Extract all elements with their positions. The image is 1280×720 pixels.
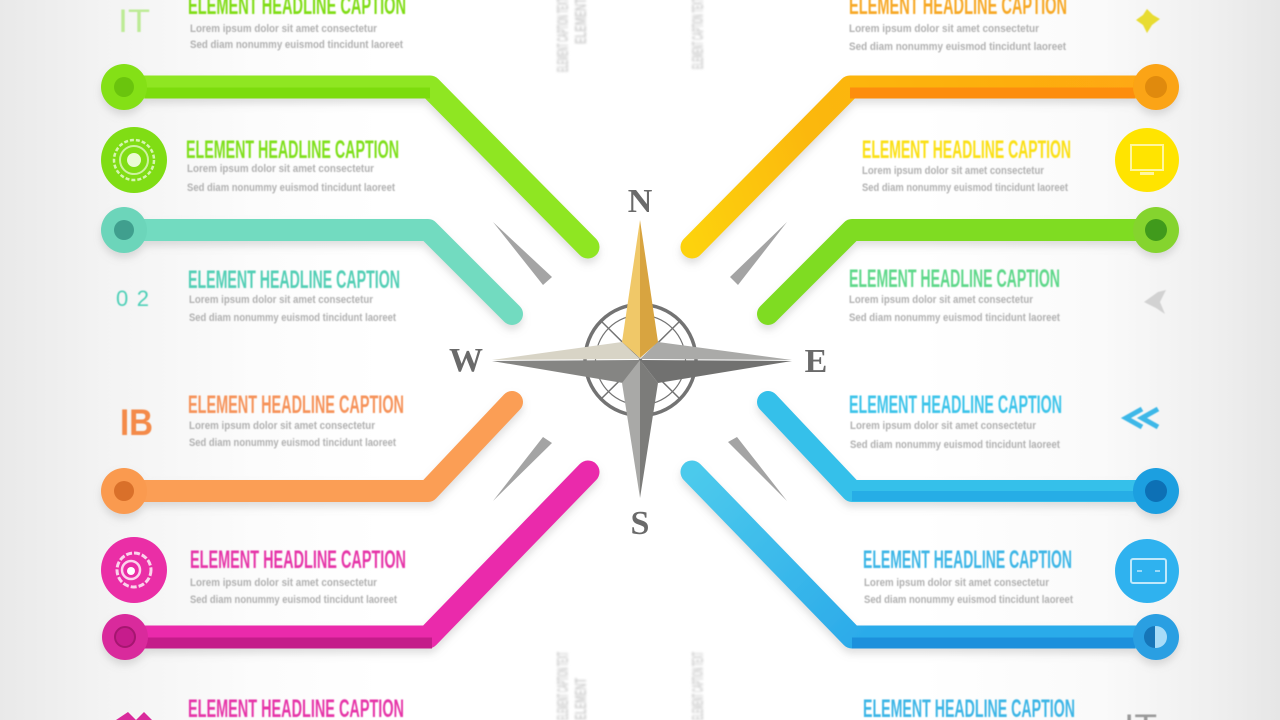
- icon: 02 label, teal: 0 2: [116, 286, 149, 311]
- vertical text strips: top: [555, 0, 707, 72]
- connector: sky blue, lower right: [768, 402, 1179, 514]
- needle: northeast: [730, 222, 787, 285]
- text block: green: [186, 136, 399, 194]
- needle: northwest: [493, 222, 552, 285]
- needle: southeast: [728, 437, 787, 501]
- text block: blue: ELEMENT HEADLINE CAPTION: [863, 546, 1072, 574]
- text block: upper left: Sed diam nonummy euismod tincidunt laoreet: [190, 39, 403, 51]
- text block: teal: ELEMENT HEADLINE CAPTION: [188, 266, 400, 294]
- text block: magenta: Sed diam nonummy euismod tincidunt laoreet: [190, 594, 397, 606]
- text block: teal: Sed diam nonummy euismod tincidunt laoreet: [189, 312, 396, 324]
- text block: upper right: Lorem ipsum dolor sit amet consectetur: [849, 23, 1040, 35]
- text block: orange: Lorem ipsum dolor sit amet consectetur: [189, 420, 376, 432]
- south point: [622, 360, 658, 498]
- text block: orange: Sed diam nonummy euismod tincidunt laoreet: [189, 437, 396, 449]
- text block: green: Lorem ipsum dolor sit amet consectetur: [187, 163, 375, 175]
- icon: blue screen badge: [1115, 539, 1179, 603]
- compass rose: [492, 220, 792, 498]
- text block: green: ELEMENT HEADLINE CAPTION: [186, 136, 399, 164]
- text block: orange: ELEMENT HEADLINE CAPTION: [188, 391, 404, 419]
- icon: green donut badge: [101, 127, 167, 193]
- text block: yellow: [862, 136, 1071, 194]
- text block: teal: Lorem ipsum dolor sit amet consectetur: [189, 294, 374, 306]
- compass letter N: N: [628, 183, 653, 220]
- text block: yellow: ELEMENT HEADLINE CAPTION: [862, 136, 1071, 164]
- text block: teal: [188, 266, 400, 324]
- compass letter W: W: [449, 342, 483, 379]
- text block: upper right: Sed diam nonummy euismod tincidunt laoreet: [849, 41, 1066, 53]
- text block: blue: Sed diam nonummy euismod tincidunt laoreet: [864, 594, 1073, 606]
- text: ELEMENT CAPTION TEXT: [690, 652, 707, 720]
- icon: yellow small diamond: [1136, 9, 1160, 33]
- text block: blue: Lorem ipsum dolor sit amet consectetur: [864, 577, 1050, 589]
- text block: magenta: Lorem ipsum dolor sit amet consectetur: [190, 577, 378, 589]
- connector: orange, lower left: [101, 402, 512, 514]
- text block: green right: [849, 265, 1060, 324]
- icon: blue double chevrons: [1126, 409, 1158, 427]
- connector: green, upper left: [101, 64, 588, 247]
- connector: yellow-orange, upper right: [692, 64, 1179, 247]
- north point: [622, 220, 658, 358]
- connector: magenta, bottom left: [102, 472, 588, 660]
- connector: blue, bottom right: [692, 472, 1179, 660]
- icon: grey small arrow: [1144, 290, 1166, 314]
- text block: green right: Lorem ipsum dolor sit amet consectetur: [849, 294, 1034, 306]
- icon: magenta gear badge: [101, 537, 167, 603]
- text block: yellow: Sed diam nonummy euismod tincidunt laoreet: [862, 182, 1068, 194]
- text block: sky blue: ELEMENT HEADLINE CAPTION: [849, 391, 1062, 419]
- text block: upper right: [849, 0, 1067, 53]
- compass letter S: S: [631, 505, 649, 542]
- compass ring: [585, 304, 696, 416]
- text block: blue: [863, 546, 1073, 606]
- west point: [492, 342, 640, 383]
- icon: yellow monitor badge: [1115, 128, 1179, 192]
- connector: teal, middle left: [101, 207, 512, 314]
- icon: IB label, orange: IB: [120, 402, 153, 443]
- icon: IT label, green: IT: [118, 3, 150, 39]
- text block: upper left: [188, 0, 406, 51]
- text: ELEMENT CAPTION TEXT: [555, 652, 572, 720]
- needle: southwest: [493, 437, 552, 501]
- east point: [640, 342, 792, 383]
- text block: sky blue: [849, 391, 1062, 451]
- text block: orange: [188, 391, 404, 449]
- text block: yellow: Lorem ipsum dolor sit amet consectetur: [862, 165, 1045, 177]
- text block: green right: Sed diam nonummy euismod tincidunt laoreet: [849, 312, 1060, 324]
- text block: sky blue: Sed diam nonummy euismod tincidunt laoreet: [850, 439, 1060, 451]
- compass letter E: E: [805, 343, 827, 380]
- connector: green, middle right: [768, 207, 1179, 314]
- text block: magenta: ELEMENT HEADLINE CAPTION: [190, 546, 406, 574]
- icon: magenta partial arrows: [116, 712, 152, 720]
- vertical text strips: bottom: [555, 652, 707, 720]
- text block: green: Sed diam nonummy euismod tincidunt laoreet: [187, 182, 395, 194]
- text block: sky blue: Lorem ipsum dolor sit amet consectetur: [850, 420, 1037, 432]
- text block: magenta: [190, 546, 406, 606]
- text block: green right: ELEMENT HEADLINE CAPTION: [849, 265, 1060, 293]
- text block: upper left: Lorem ipsum dolor sit amet consectetur: [190, 23, 378, 35]
- vertical text strips: bottom: ELEMENT: [573, 678, 590, 720]
